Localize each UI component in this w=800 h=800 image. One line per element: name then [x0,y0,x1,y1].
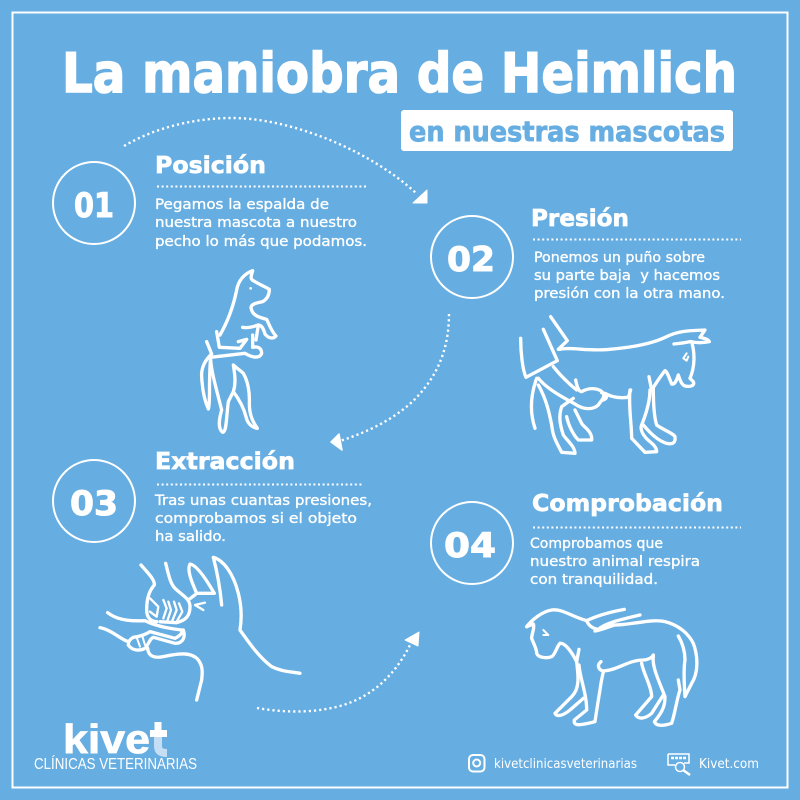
heading presión: Presión [531,204,629,232]
body text presión [534,250,725,302]
step 1: posición [53,151,367,432]
illustration: calm dog standing [527,609,697,725]
body text posición: pecho lo más que podamos. [155,234,367,250]
step 3: extracción [53,447,372,700]
number badge 04: 04 [444,526,496,566]
body text extracción: ha salido. [155,529,226,545]
number badge 04 [431,502,513,584]
arrow: step 2 to step 3 [331,314,449,450]
icon: www magnifier [668,754,690,775]
website [668,754,759,775]
illustration: hands opening dog's mouth [100,557,300,700]
number badge 01 [53,162,135,244]
body text extracción [154,493,372,545]
body text comprobación [530,536,700,588]
instagram handle: kivetclinicasveterinarias [494,757,637,772]
heading comprobación: Comprobación [532,489,723,517]
instagram handle [469,755,637,772]
number badge 01: 01 [74,186,114,226]
logo: kivet clínicas veterinarias [34,716,197,773]
heading posición: Posición [155,151,266,179]
body text posición [155,197,367,250]
number badge 02 [431,216,513,298]
body text comprobación: con tranquilidad. [530,572,658,588]
heading extracción: Extracción [155,447,295,475]
subtitle badge: en nuestras mascotas [409,116,725,148]
logo: kivet clínicas veterinarias: kive [63,716,150,762]
body text comprobación: Comprobamos que [530,536,663,552]
body text extracción: Tras unas cuantas presiones, [154,493,372,509]
body text posición: Pegamos la espalda de [155,197,329,213]
number badge 03 [53,460,135,542]
illustration: dog held upright [202,271,276,432]
body text comprobación: nuestro animal respira [530,554,700,570]
arrow: step 3 to step 4 [257,632,419,712]
step 4: comprobación [431,489,741,725]
arrow: step 1 to step 2 [124,118,427,203]
body text presión: Ponemos un puño sobre [534,250,705,266]
body text presión: presión con la otra mano. [534,286,725,302]
number badge 03: 03 [70,484,118,524]
logo: kivet clínicas veterinarias: CLÍNICAS VETERINARIAS [34,754,197,773]
website: Kivet.com [699,756,759,772]
icon: instagram [469,755,484,772]
step 2: presión [431,204,741,453]
body text posición: nuestra mascota a nuestro [155,215,357,231]
illustration: dog with hands pressing belly [521,317,709,453]
body text presión: su parte baja y hacemos [534,268,720,284]
title: La maniobra de Heimlich [62,41,737,105]
number badge 02: 02 [447,240,495,280]
body text extracción: comprobamos si el objeto [155,511,357,527]
